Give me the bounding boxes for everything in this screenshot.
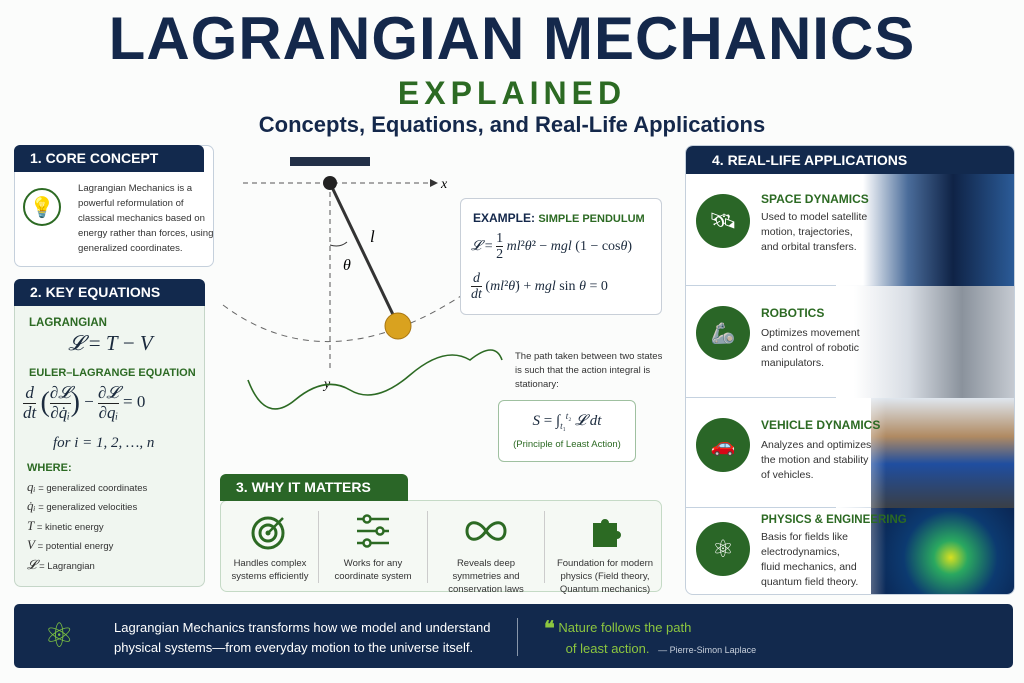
title: LAGRANGIAN MECHANICS <box>109 5 915 72</box>
subtitle: Concepts, Equations, and Real-Life Applications <box>259 112 765 137</box>
text: core concept: Lagrangian Mechanics is a powerful reformulation of classical mechanics based on energy rather than forces, using generalized coordinates. <box>78 183 213 254</box>
row: space dynamics: 🛰 <box>709 208 737 233</box>
pendulum diagram: x <box>440 177 448 192</box>
panel: example simple pendulum: d <box>473 271 480 286</box>
panel: example simple pendulum: EXAMPLE: SIMPLE PENDULUM <box>473 211 645 225</box>
panel: key equations: dt <box>23 403 36 422</box>
where list: V = potential energy <box>27 537 113 552</box>
panel: key equations: ∂𝓛 <box>98 383 119 402</box>
row: physics & engineering: quantum field theory. <box>761 576 858 588</box>
panel: key equations: ( ) − = 0 <box>40 387 145 418</box>
icon: atom: ⚛ <box>44 617 74 655</box>
heading: applications <box>686 146 1016 174</box>
row: space dynamics: Used to model satellite <box>761 211 867 223</box>
heading: core concept: 1. CORE CONCEPT <box>30 150 158 166</box>
quote: ❝ Nature follows the path <box>544 618 691 640</box>
row: physics & engineering: PHYSICS & ENGINEERING <box>761 514 907 526</box>
item: symmetries: Reveals deep symmetries and conservation laws <box>448 558 524 595</box>
row: robotics: manipulators. <box>761 357 824 369</box>
row: vehicle dynamics: VEHICLE DYNAMICS <box>761 418 880 432</box>
pendulum diagram: y <box>322 377 331 392</box>
panel: example simple pendulum <box>460 198 662 315</box>
panel: key equations <box>14 279 205 587</box>
where list: 𝓛 = Lagrangian <box>27 556 95 572</box>
item: symmetries <box>448 521 524 595</box>
row: vehicle dynamics: 🚗 <box>711 434 735 456</box>
row: vehicle dynamics: Analyzes and optimizes <box>761 439 871 451</box>
row: robotics: and control of robotic <box>761 342 859 354</box>
panel: key equations: d <box>25 383 34 402</box>
row: robotics: ROBOTICS <box>761 306 824 320</box>
panel: key equations: ∂q̇ᵢ <box>50 403 70 422</box>
footer text: physical systems—from everyday motion to the universe itself. <box>114 640 473 655</box>
quote <box>544 618 756 656</box>
footer text <box>114 620 490 655</box>
pendulum diagram <box>222 157 460 392</box>
row: space dynamics: motion, trajectories, <box>761 226 853 238</box>
heading: why it matters <box>220 474 408 501</box>
item: foundation <box>557 519 653 595</box>
panel: example simple pendulum: 1 <box>496 231 503 246</box>
row: space dynamics: SPACE DYNAMICS <box>761 192 869 206</box>
pendulum diagram: θ <box>343 257 351 274</box>
icon: lightbulb <box>23 188 61 226</box>
row: space dynamics <box>686 174 1016 286</box>
footer banner <box>14 604 1013 668</box>
action integral box <box>498 400 636 462</box>
quote: of least action. — Pierre-Simon Laplace <box>566 641 756 656</box>
path curve <box>247 349 503 410</box>
item: coordinate system: Works for any coordinate system <box>334 558 412 582</box>
row: robotics: Optimizes movement <box>761 327 860 339</box>
lagrangian: LAGRANGIAN <box>29 317 107 329</box>
row: physics & engineering: fluid mechanics, and <box>761 561 857 573</box>
where list: T = kinetic energy <box>27 518 104 532</box>
where list: qᵢ = generalized coordinates <box>27 478 147 494</box>
pendulum diagram: l <box>370 227 375 246</box>
where list <box>27 462 147 572</box>
row: physics & engineering: ⚛ <box>712 536 734 562</box>
row: robotics <box>686 286 1016 398</box>
where list: q̇ᵢ = generalized velocities <box>27 498 137 513</box>
row: physics & engineering: Basis for fields like <box>761 531 848 543</box>
item: handles complex: Handles complex systems efficiently <box>232 558 308 582</box>
panel: example simple pendulum: 2 <box>496 247 503 262</box>
row: physics & engineering <box>696 508 1014 594</box>
heading: key equations: 2. KEY EQUATIONS <box>30 284 160 300</box>
panel: key equations: ∂𝓛 <box>50 383 71 402</box>
heading: applications: 4. REAL-LIFE APPLICATIONS <box>712 152 907 168</box>
panel: core concept <box>14 145 214 267</box>
panel: example simple pendulum: 𝓛 = ml²θ̇² − mgl (1 − cosθ) <box>471 239 632 254</box>
row: physics & engineering: electrodynamics, <box>761 546 840 558</box>
row: vehicle dynamics: the motion and stability <box>761 454 868 466</box>
action integral box: S = ∫t₁t₂ 𝓛 dt <box>533 411 601 431</box>
heading: key equations <box>14 279 205 306</box>
footer text: Lagrangian Mechanics transforms how we model and understand <box>114 620 490 635</box>
panel: real-life applications <box>685 145 1015 595</box>
item: foundation: Foundation for modern physics (Field theory, Quantum mechanics) <box>557 558 653 595</box>
panel: example simple pendulum: dt <box>471 287 482 302</box>
panel: key equations: ∂qᵢ <box>99 403 118 422</box>
row: vehicle dynamics: of vehicles. <box>761 469 814 481</box>
panel: key equations: for i = 1, 2, …, n <box>53 435 154 451</box>
item: handles complex <box>232 516 308 582</box>
panel: example simple pendulum: (ml²θ̇) + mgl sin θ = 0 <box>485 279 608 294</box>
row: vehicle dynamics <box>686 398 1016 508</box>
heading: core concept <box>14 145 204 172</box>
where list: WHERE: <box>27 462 72 474</box>
subtitle: explained: EXPLAINED <box>398 75 626 111</box>
action integral box: (Principle of Least Action) <box>513 439 621 450</box>
item: coordinate system <box>334 514 412 582</box>
icon: lightbulb: 💡 <box>30 196 54 218</box>
panel: key equations: 𝓛 = T − V <box>68 331 153 355</box>
panel: why it matters <box>220 500 662 592</box>
row: robotics: 🦾 <box>711 322 735 344</box>
row: space dynamics: and orbital transfers. <box>761 241 857 253</box>
euler-lagrange: EULER–LAGRANGE EQUATION <box>29 367 196 379</box>
text: least action: The path taken between two states is such that the action integral is stationary: <box>515 351 662 390</box>
heading: why it matters: 3. WHY IT MATTERS <box>236 479 371 495</box>
